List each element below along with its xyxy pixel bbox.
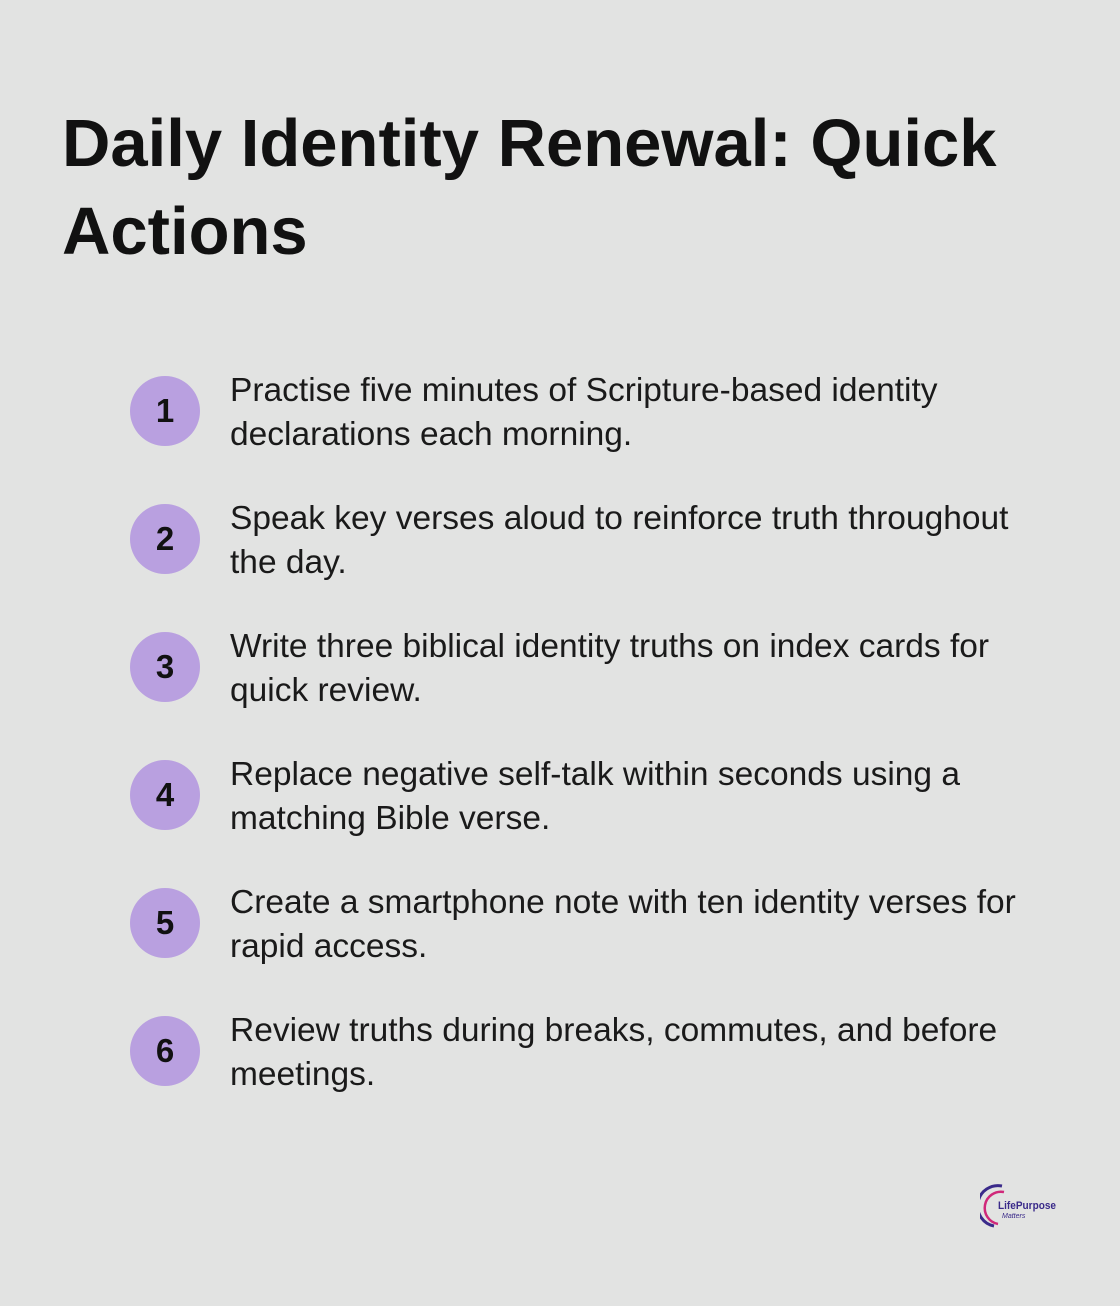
logo: LifePurpose [998,1200,1056,1212]
item 5: Create a smartphone note with ten identity verses for rapid access. [230,884,1016,965]
item 3: 3 [156,648,174,685]
item 4: Replace negative self-talk within seconds using a matching Bible verse. [230,756,960,837]
item 4: 4 [156,776,174,813]
item 2: 2 [156,520,174,557]
item 6: 6 [156,1032,174,1069]
title: Daily Identity Renewal: Quick Actions [62,106,997,269]
item 1: Practise five minutes of Scripture-based identity declarations each morning. [230,372,938,453]
item 6: Review truths during breaks, commutes, and before meetings. [230,1012,997,1093]
item 5: 5 [156,904,174,941]
logo: Matters [1002,1213,1026,1220]
item 2: Speak key verses aloud to reinforce truth throughout the day. [230,500,1008,581]
item 1: 1 [156,392,174,429]
item 3: Write three biblical identity truths on index cards for quick review. [230,628,989,709]
logo [980,1184,1056,1228]
